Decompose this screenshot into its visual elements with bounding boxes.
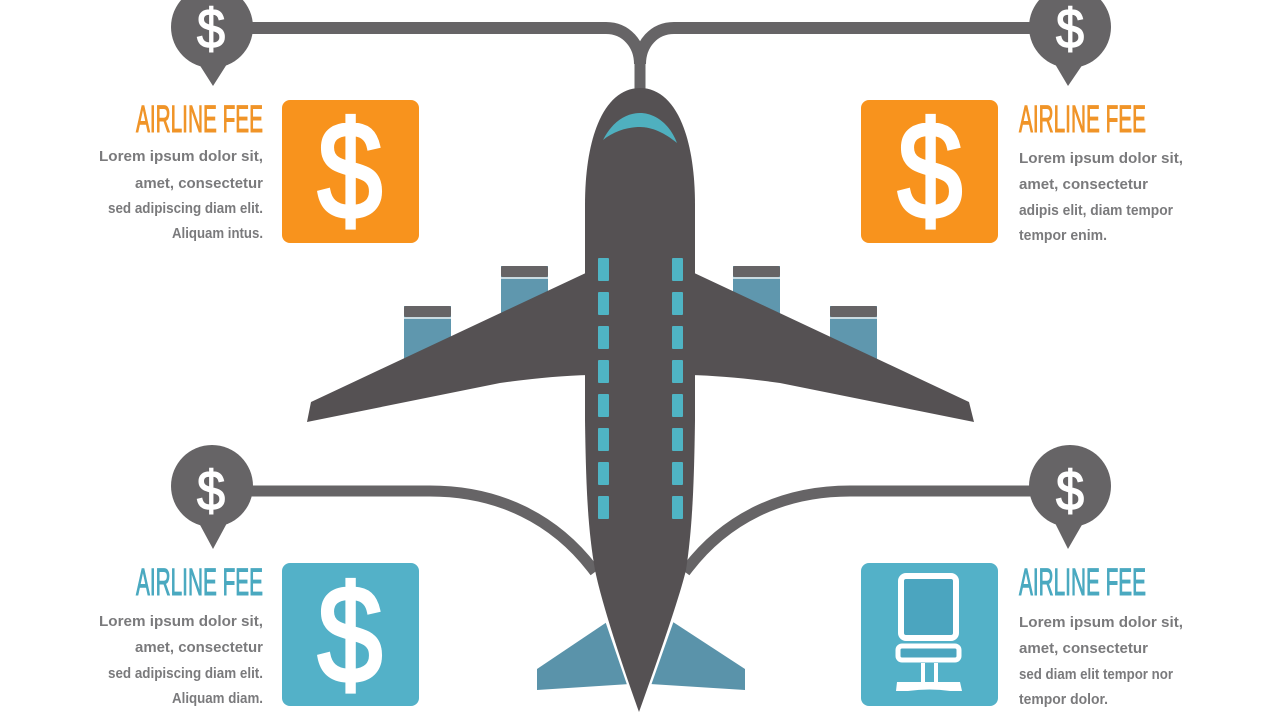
pin: bottom right: $ <box>1056 461 1084 523</box>
icon: dollar tile: $ <box>898 95 962 248</box>
description: Lorem ipsum dolor sit, <box>1019 614 1183 631</box>
description: Lorem ipsum dolor sit, <box>1019 150 1183 167</box>
fin edge highlight <box>604 610 675 712</box>
icon: dollar tile <box>282 95 419 248</box>
description: amet, consectetur <box>135 639 263 656</box>
cabin windows <box>598 258 683 519</box>
windshield <box>603 113 677 143</box>
description: tempor dolor. <box>1019 691 1108 708</box>
tail fins <box>537 622 745 690</box>
panel: top right fee <box>861 95 1183 248</box>
description <box>99 613 263 707</box>
engines <box>404 266 877 366</box>
panel: top left fee <box>99 95 419 248</box>
heading: AIRLINE FEE <box>1019 99 1146 141</box>
wings <box>307 271 974 422</box>
pin: top left: $ <box>197 0 225 61</box>
description: Lorem ipsum dolor sit, <box>99 613 263 630</box>
description: amet, consectetur <box>1019 176 1148 193</box>
pin: top right <box>1029 0 1111 86</box>
pin: bottom right <box>1029 445 1111 549</box>
panel: bottom left fee <box>99 559 419 712</box>
description: Aliquam intus. <box>172 225 263 242</box>
description: amet, consectetur <box>135 175 263 192</box>
fuselage <box>585 88 695 712</box>
icon: dollar tile <box>861 95 998 248</box>
description: adipis elit, diam tempor <box>1019 202 1173 219</box>
description: Aliquam diam. <box>172 690 263 707</box>
icon: dollar tile: $ <box>318 95 382 248</box>
description: sed adipiscing diam elit. <box>108 200 263 217</box>
icon: dollar tile: $ <box>318 559 382 712</box>
heading: AIRLINE FEE <box>136 562 263 604</box>
pin: top right: $ <box>1056 0 1084 61</box>
pin: bottom left <box>171 445 253 549</box>
pin: top left <box>171 0 253 86</box>
heading: AIRLINE FEE <box>136 99 263 141</box>
pin: bottom left: $ <box>197 461 225 523</box>
description: sed adipiscing diam elit. <box>108 665 263 682</box>
heading: AIRLINE FEE <box>1019 562 1146 604</box>
description <box>1019 150 1183 244</box>
description: amet, consectetur <box>1019 640 1148 657</box>
description: sed diam elit tempor nor <box>1019 666 1173 683</box>
description: tempor enim. <box>1019 227 1107 244</box>
description <box>99 148 263 242</box>
connector lines: top <box>245 28 1035 92</box>
icon: dollar tile <box>282 559 419 712</box>
description: Lorem ipsum dolor sit, <box>99 148 263 165</box>
connector lines: bottom <box>245 491 1035 572</box>
description <box>1019 614 1183 708</box>
icon: seat tile <box>861 563 998 706</box>
panel: bottom right fee <box>861 562 1183 708</box>
